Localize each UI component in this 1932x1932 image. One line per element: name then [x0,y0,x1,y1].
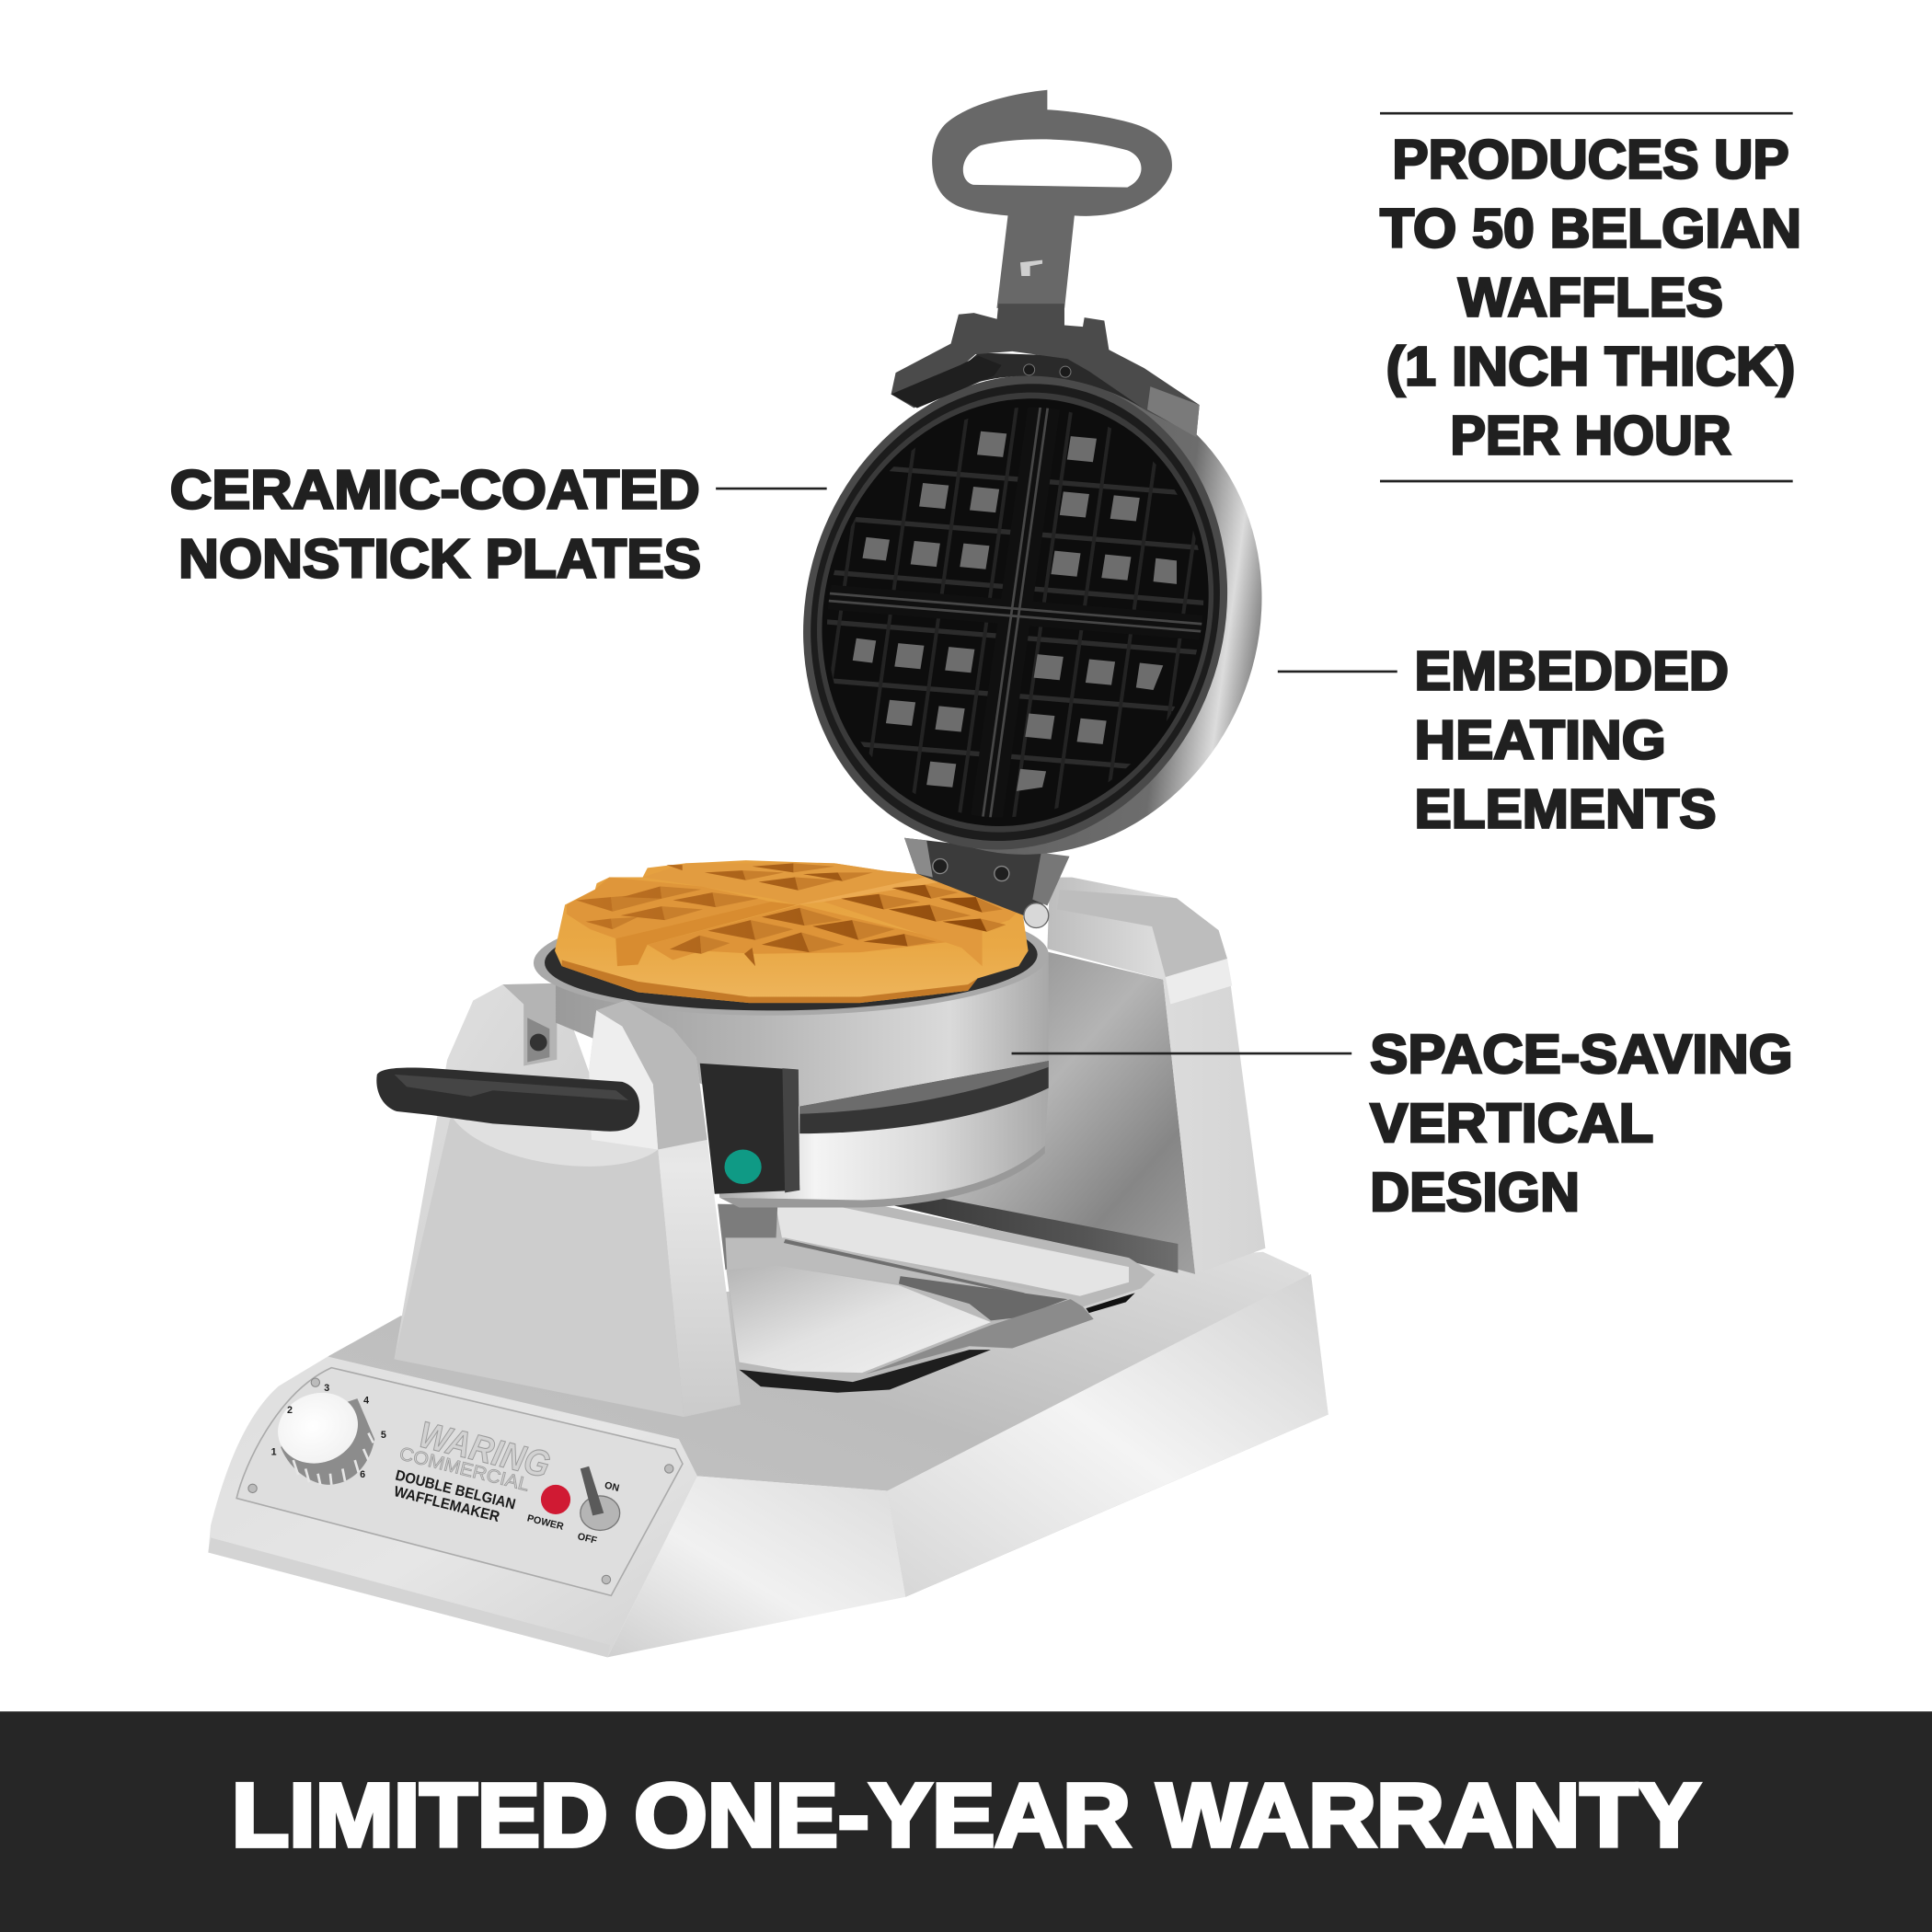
tray shadow [740,1350,991,1393]
callout: ceramic plates: NONSTICK PLATES [178,527,701,589]
panel logo and product name [388,1410,554,1534]
waffle [555,860,1029,1003]
right quadrant [823,877,1022,966]
left tower rear section [395,983,684,1417]
base [208,1252,1328,1657]
control panel [236,1368,683,1595]
callout: production capacity: PRODUCES UP [1392,129,1789,190]
toggle switch [581,1466,620,1530]
lower cooking plate body [533,897,1050,1207]
dial numbers: 6 [360,1469,365,1480]
callout: vertical design: SPACE-SAVING [1370,1023,1793,1085]
callout: production capacity: TO 50 BELGIAN [1380,198,1801,259]
status indicator block [700,1064,799,1194]
panel logo and product name: DOUBLE BELGIAN [394,1467,517,1512]
panel logo and product name: WAFFLEMAKER [392,1483,501,1525]
callout: production capacity: (1 INCH THICK) [1386,336,1795,397]
warranty banner: LIMITED ONE-YEAR WARRANTY [232,1765,1700,1865]
waffle pockets [576,863,987,966]
tray rim stripe [726,1237,1067,1304]
black front handle [376,1067,639,1132]
callout: ceramic plates [170,458,827,589]
top quadrant [643,863,933,904]
callout: production capacity: WAFFLES [1458,267,1723,328]
upper lid with nonstick plate [803,375,1262,855]
temperature dial [268,1382,374,1485]
upper handle [891,90,1200,437]
right tower [912,878,1265,1274]
green indicator light [725,1150,762,1184]
callout: ceramic plates: CERAMIC-COATED [170,458,700,520]
dial numbers: 1 [271,1447,277,1458]
tray back wall [776,1207,1129,1296]
callout: production capacity [1380,113,1801,481]
front quadrant [648,904,952,960]
tray reflection [899,1276,1067,1320]
warranty banner [0,1711,1932,1932]
tray front handle [865,1299,1094,1374]
tray left corner [718,1204,777,1270]
panel screws [248,1378,673,1584]
callout: vertical design: DESIGN [1370,1161,1580,1223]
waffle plate raised squares [853,431,1177,791]
panel logo and product name: COMMERCIAL [397,1443,531,1496]
waffle pocket lit faces [611,863,1006,954]
tray body [718,1204,1155,1389]
tray slot [1086,1293,1135,1313]
callout: vertical design [1012,1023,1793,1223]
drip tray [718,1196,1178,1393]
dial numbers: 3 [324,1383,329,1394]
lower hinge [904,838,1069,927]
callout: heating elements: ELEMENTS [1415,777,1717,839]
callout: heating elements: EMBEDDED [1415,639,1729,701]
left tower front section [395,1001,741,1417]
lid shell [789,361,1293,872]
callout: heating elements: HEATING [1415,708,1666,770]
callout: vertical design: VERTICAL [1370,1092,1653,1154]
power light [541,1485,570,1514]
callout: heating elements [1278,639,1729,839]
switch on label: ON [604,1480,621,1494]
panel logo and product name: WARING [415,1414,554,1486]
power label: POWER [526,1512,565,1533]
callout: production capacity: PER HOUR [1450,405,1731,466]
tray floor [727,1265,991,1373]
waffle silhouette [555,860,1029,1003]
waffle maker product illustration [208,90,1328,1657]
dial numbers: 4 [363,1395,369,1406]
dial numbers: 2 [287,1405,293,1416]
nonstick plate [803,375,1227,850]
dial numbers: 5 [381,1430,386,1441]
dial numbers [271,1383,386,1480]
handle bracket [891,304,1200,437]
shadow under tower behind tray [874,1196,1178,1273]
left quadrant top [567,877,771,938]
switch off label: OFF [576,1531,599,1547]
